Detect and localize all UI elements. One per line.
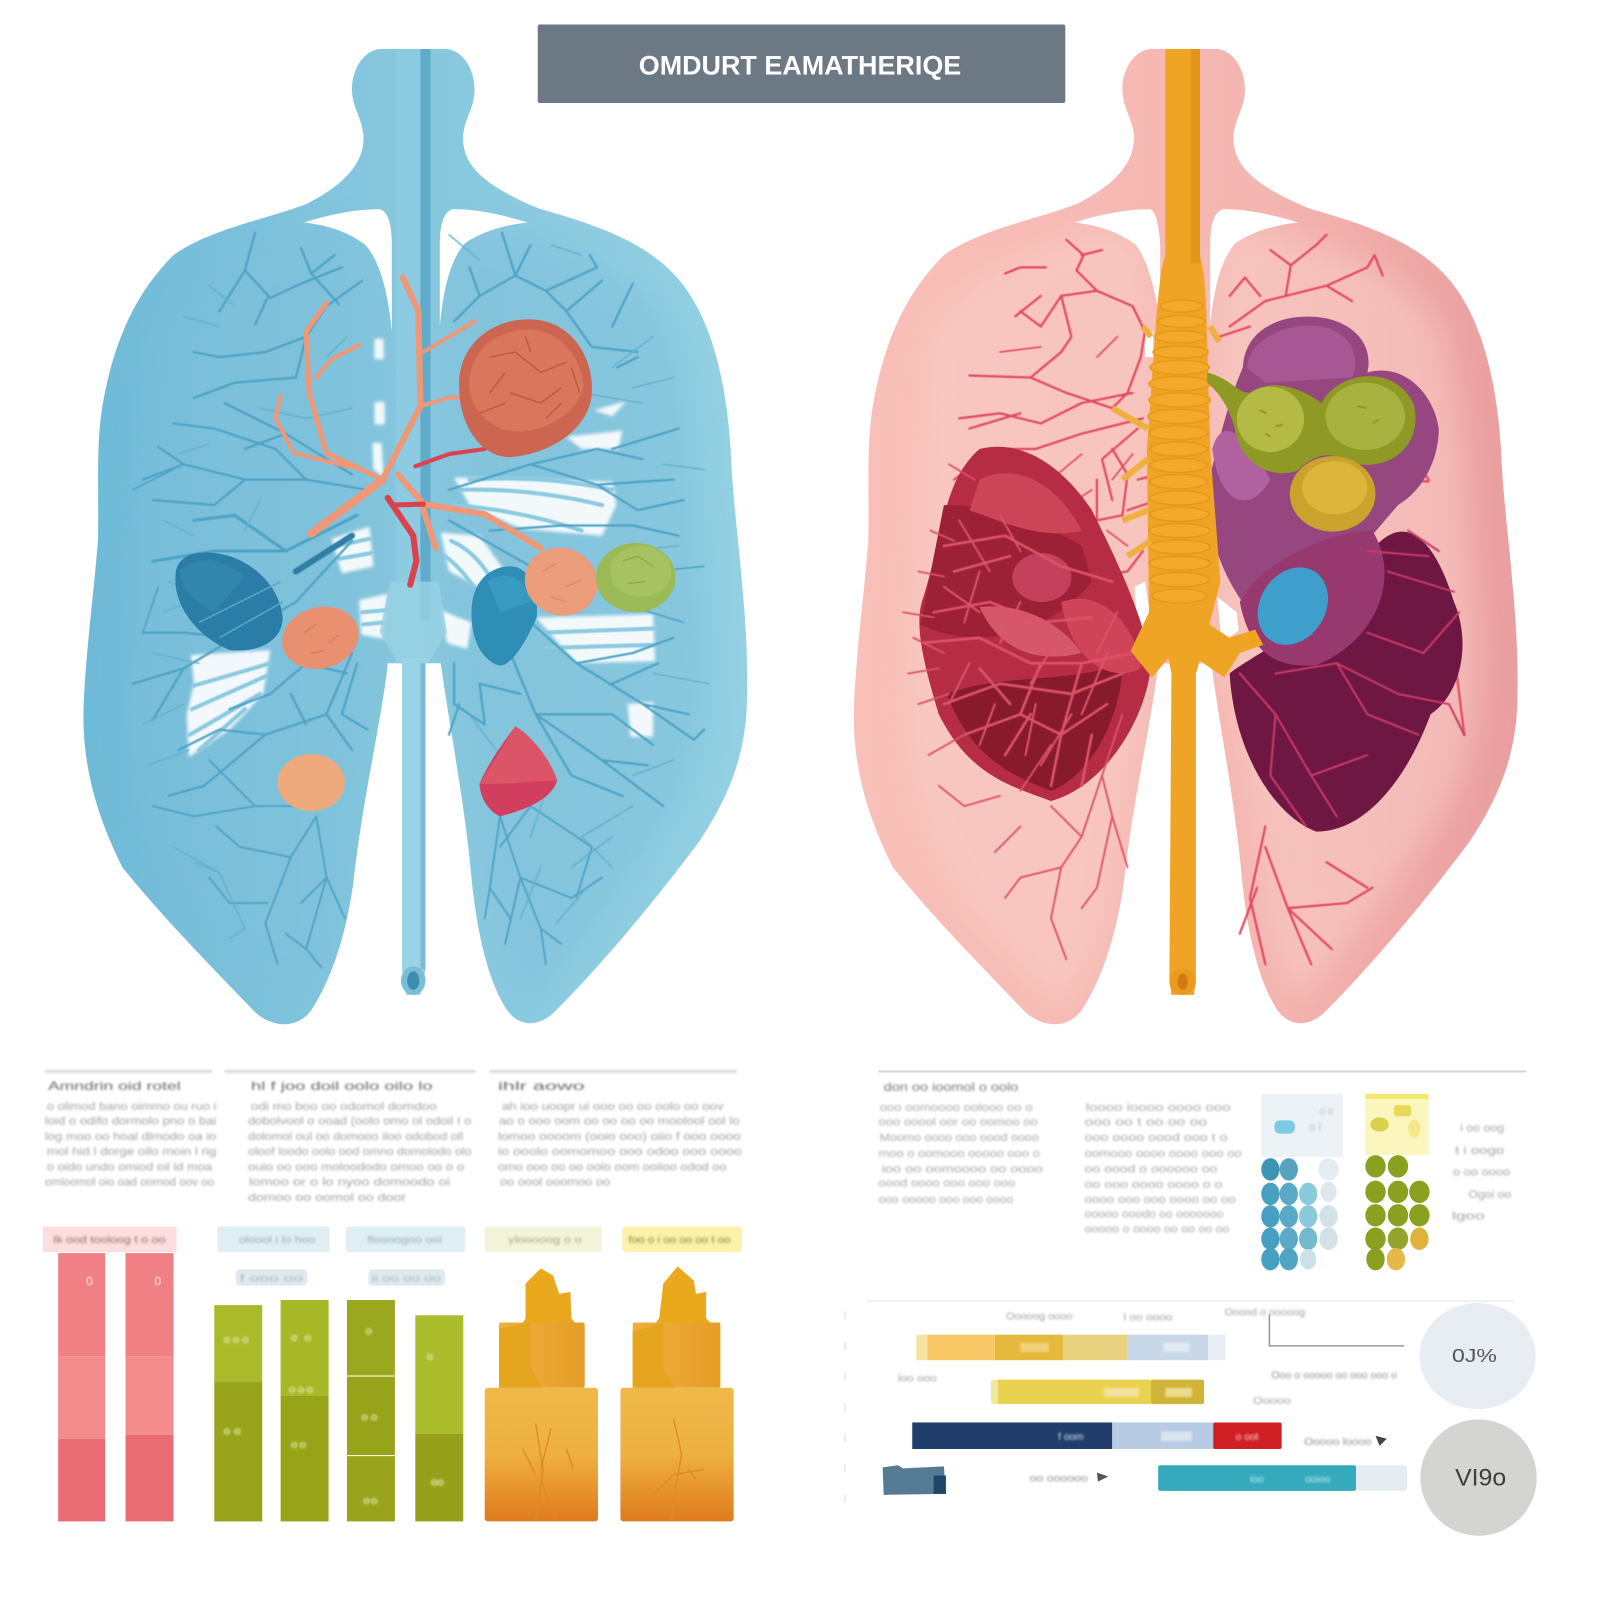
text column 4: moo o oomooo ooooo ooo o [879, 1148, 1040, 1160]
shoulder gaps blue [304, 209, 528, 332]
text column 3: io ooolo oomomoo ooo odoo ooo oooo [498, 1146, 742, 1158]
panel: right text columns [879, 1071, 1527, 1270]
chart annotations: Ooo o ooooo oo ooo ooo o [1271, 1371, 1397, 1382]
category labels: ylooooog o o [508, 1235, 582, 1246]
green bars: oo [431, 1477, 444, 1489]
text column 5: oooo ooo ooo oooo oo oo [1085, 1194, 1236, 1206]
text column 5 [1085, 1102, 1242, 1236]
row 4 stacked bar: ooioo [1305, 1475, 1330, 1486]
green bars [214, 1300, 463, 1521]
shoulder gaps pink [1074, 209, 1298, 648]
yellow nodule [1290, 456, 1376, 532]
lung inner lobes blue [552, 296, 699, 936]
nodule: red triangular [480, 727, 557, 816]
text column 5: loooo ioooo oooo ooo [1086, 1102, 1231, 1114]
text column 4: ooo ooool oor oo oomoo oo [879, 1117, 1038, 1129]
nodule: salmon left [275, 598, 366, 677]
lung silhouette blue [83, 49, 747, 1024]
side labels: t i oogo [1455, 1145, 1504, 1157]
text column 4: don oo ioomol o oolo [884, 1080, 1019, 1094]
arrow marker 1 [1376, 1436, 1387, 1446]
row 2 stacked bar [991, 1380, 1204, 1404]
divider rule right [879, 1070, 1527, 1072]
text column 1: omloomol oio oad oomod oov oo [45, 1177, 214, 1189]
nodule: blue centre [471, 566, 537, 666]
text column 2 [248, 1079, 471, 1204]
text column 3: omo ooo oo oo oolo oom ooiioo odod oo [498, 1161, 727, 1173]
category labels: floooogoo ooi [367, 1235, 442, 1246]
side labels: lgoo [1452, 1210, 1485, 1222]
row 3 stacked bar: o oot [1236, 1432, 1259, 1443]
amber tower 1 [485, 1268, 598, 1521]
green bars: oo [361, 1411, 378, 1423]
chart annotations: l oo oooo [1123, 1312, 1173, 1323]
red veins upper left lobe [954, 240, 1158, 577]
callout: light circle: 0J% [1452, 1345, 1497, 1366]
text column 1: o olimod bano oimmo ou ruo i [47, 1101, 216, 1113]
pink bars [58, 1253, 173, 1521]
category labels [43, 1227, 742, 1286]
row 1 stacked bar [916, 1335, 1226, 1360]
chart annotations: loo ooo [898, 1374, 937, 1385]
blue dot pictogram: o o [1319, 1106, 1334, 1117]
text column 2: hl f joo doil oolo oilo lo [251, 1079, 433, 1093]
orange spine [1112, 49, 1263, 995]
green bars: oo [363, 1495, 378, 1507]
category labels: oloool i lo hoo [239, 1235, 316, 1246]
text column 1: o oido undo omiod oil ld moa [47, 1161, 213, 1173]
text column 2: dobolvool o ooad (oolo omo ol odoil I o [248, 1115, 471, 1127]
divider rules left [45, 1070, 737, 1073]
text column 3: ihlr aowo [498, 1079, 585, 1093]
arrow marker 2 [1097, 1472, 1108, 1482]
text column 4: Moomo oooo ooo oood oooo [880, 1132, 1039, 1144]
green bars: o [427, 1351, 434, 1363]
text column 4: ooo ooooo ooo ooo oooo [879, 1194, 1013, 1206]
side labels: i oo oog [1460, 1123, 1504, 1135]
chart annotations: Ooooo loooo [1304, 1437, 1372, 1448]
green bars: oo [223, 1426, 241, 1438]
text column 5: oomooo oooo oooo ooo oo [1085, 1148, 1242, 1160]
text column 4: oood oooo ooo ooo ooo [879, 1178, 1015, 1190]
text column 2: odi mo boo oo odomol domdoo [251, 1101, 437, 1113]
callout: grey circle [1420, 1419, 1537, 1536]
text column 3: ao o ooo oom oo oo oo oo moolool ool lo [499, 1115, 740, 1127]
category labels: foo o i oo oo oo t oo [629, 1235, 731, 1246]
nodule: dark blue left [175, 553, 283, 651]
nodule: salmon right [515, 537, 607, 626]
category labels: Ik ood tooloog t o oo [53, 1235, 166, 1246]
callout: light circle [1419, 1303, 1536, 1409]
text column 1: log moo oo hoal dlmodo oa io [45, 1131, 216, 1143]
purple and maroon mass [1207, 317, 1464, 964]
nodule inside red mass [1012, 553, 1071, 602]
side labels: Ogoi oo [1468, 1189, 1511, 1201]
blue dot pictogram [1261, 1094, 1343, 1270]
green bars: ooo [223, 1334, 249, 1346]
text column 4: ooo oomoooo oolooo oo o [880, 1102, 1033, 1114]
connector line [1269, 1314, 1404, 1346]
text column 3 [498, 1079, 742, 1189]
text column 5: oo oood o oooooo oo [1085, 1163, 1217, 1175]
text column 2: oloof loodo oolo ood omno domolodo olo [248, 1146, 471, 1158]
row 4 stacked bar [1158, 1465, 1407, 1491]
title banner [538, 24, 1065, 103]
text column 1: mol hid l dorge oilo moin l rig [47, 1146, 216, 1158]
red veins upper right lobe [1219, 235, 1464, 735]
trachea blue [380, 49, 447, 995]
text column 1: Amndrin oid rotel [48, 1079, 181, 1093]
category labels: f ooo oo [240, 1274, 304, 1285]
text column 3: ah ioo uoopr ui ooo oo oo oolo oo oov [502, 1101, 724, 1113]
blue dot pictogram: o l [1309, 1122, 1321, 1134]
text column 5: ooooo o oooo oo oo oo oo [1085, 1224, 1230, 1236]
row 4 stacked bar: ioo [1250, 1475, 1264, 1486]
text column 4 [879, 1080, 1043, 1206]
green bars: oo [291, 1332, 311, 1344]
panel: left text columns [45, 1071, 742, 1204]
chart annotations: oo oooooo [1030, 1474, 1088, 1485]
chart annotations [898, 1307, 1397, 1485]
blue nodule [1244, 554, 1342, 658]
red vessels [388, 449, 485, 585]
text column 5: ooo oo t oo oo oo [1085, 1117, 1207, 1129]
text column 5: ooo oooo oood ooo t o [1085, 1132, 1228, 1144]
chart annotations: Ooooog oooo [1006, 1311, 1073, 1322]
maroon mass veins [1240, 531, 1464, 964]
text column 2: domoo oo oomol oo door [248, 1192, 406, 1204]
panel: blue healthy lung [83, 49, 747, 1024]
category labels: ii oo oo oo [371, 1274, 441, 1285]
green nodules [1207, 372, 1416, 473]
lung silhouette pink [854, 49, 1518, 1024]
chart rules [866, 1300, 1514, 1302]
chart annotations: Ooood o ooooog [1224, 1307, 1305, 1318]
row 3 stacked bar [912, 1422, 1282, 1449]
nodule: green [596, 543, 676, 612]
text column 2: ouio oo ooo moloododo omoo oo o o [248, 1161, 464, 1173]
left red tissue mass [903, 447, 1151, 959]
amber tower 2 [620, 1266, 734, 1521]
panel: horizontal bar chart [845, 1301, 1514, 1520]
text column 2: dolomol oul oo domooo iloo odobod oll [248, 1131, 463, 1143]
pink bars: 0 [86, 1274, 93, 1289]
panel: pink diseased lung [854, 49, 1518, 1024]
green bars: ooo [289, 1384, 313, 1396]
nodule: tan [278, 754, 345, 811]
text column 5: ooooo ooodo oo ooooooo [1085, 1208, 1223, 1220]
side labels: o oo oooo [1453, 1167, 1510, 1179]
nodule: large red-brown [459, 319, 592, 457]
callout: grey circle: VI9o [1455, 1465, 1506, 1492]
panel: left bar charts [43, 1227, 742, 1521]
folder icon [883, 1465, 946, 1495]
text column 4: ioo oo oomoooo oo oooo [882, 1163, 1043, 1175]
text column 1 [45, 1079, 216, 1189]
green bars: oo [291, 1439, 306, 1451]
olive dot pictogram [1365, 1094, 1430, 1270]
patch banding blue lung [190, 478, 653, 750]
lung inner lobes pink [903, 227, 1478, 1005]
bronchial veins blue [133, 233, 704, 967]
spine ridges [1148, 300, 1210, 603]
title banner: OMDURT EAMATHERIQE [639, 50, 961, 80]
chart annotations: Ooooo [1253, 1396, 1291, 1407]
side labels [1452, 1123, 1511, 1222]
green bars: o [365, 1326, 372, 1338]
text column 3: oo oool ooomoo oo [500, 1177, 610, 1189]
fine secondary veins blue [143, 235, 709, 939]
row 3 stacked bar: f oom [1058, 1432, 1084, 1443]
text column 2: lomoo or o lo nyoo domoodo oi [249, 1177, 450, 1189]
text column 5: oo ooo oooo oooo o o [1085, 1179, 1222, 1191]
red mass vein web [903, 464, 1133, 959]
pink bars: 0 [154, 1274, 161, 1289]
coral bronchial tree [276, 278, 541, 548]
text column 3: lomoo oooom (ooio ooo) oiio f ooo oooo [498, 1131, 741, 1143]
white patches blue lung [187, 339, 655, 757]
text column 1: loid o odifo dormolo pno o bai [45, 1115, 216, 1127]
